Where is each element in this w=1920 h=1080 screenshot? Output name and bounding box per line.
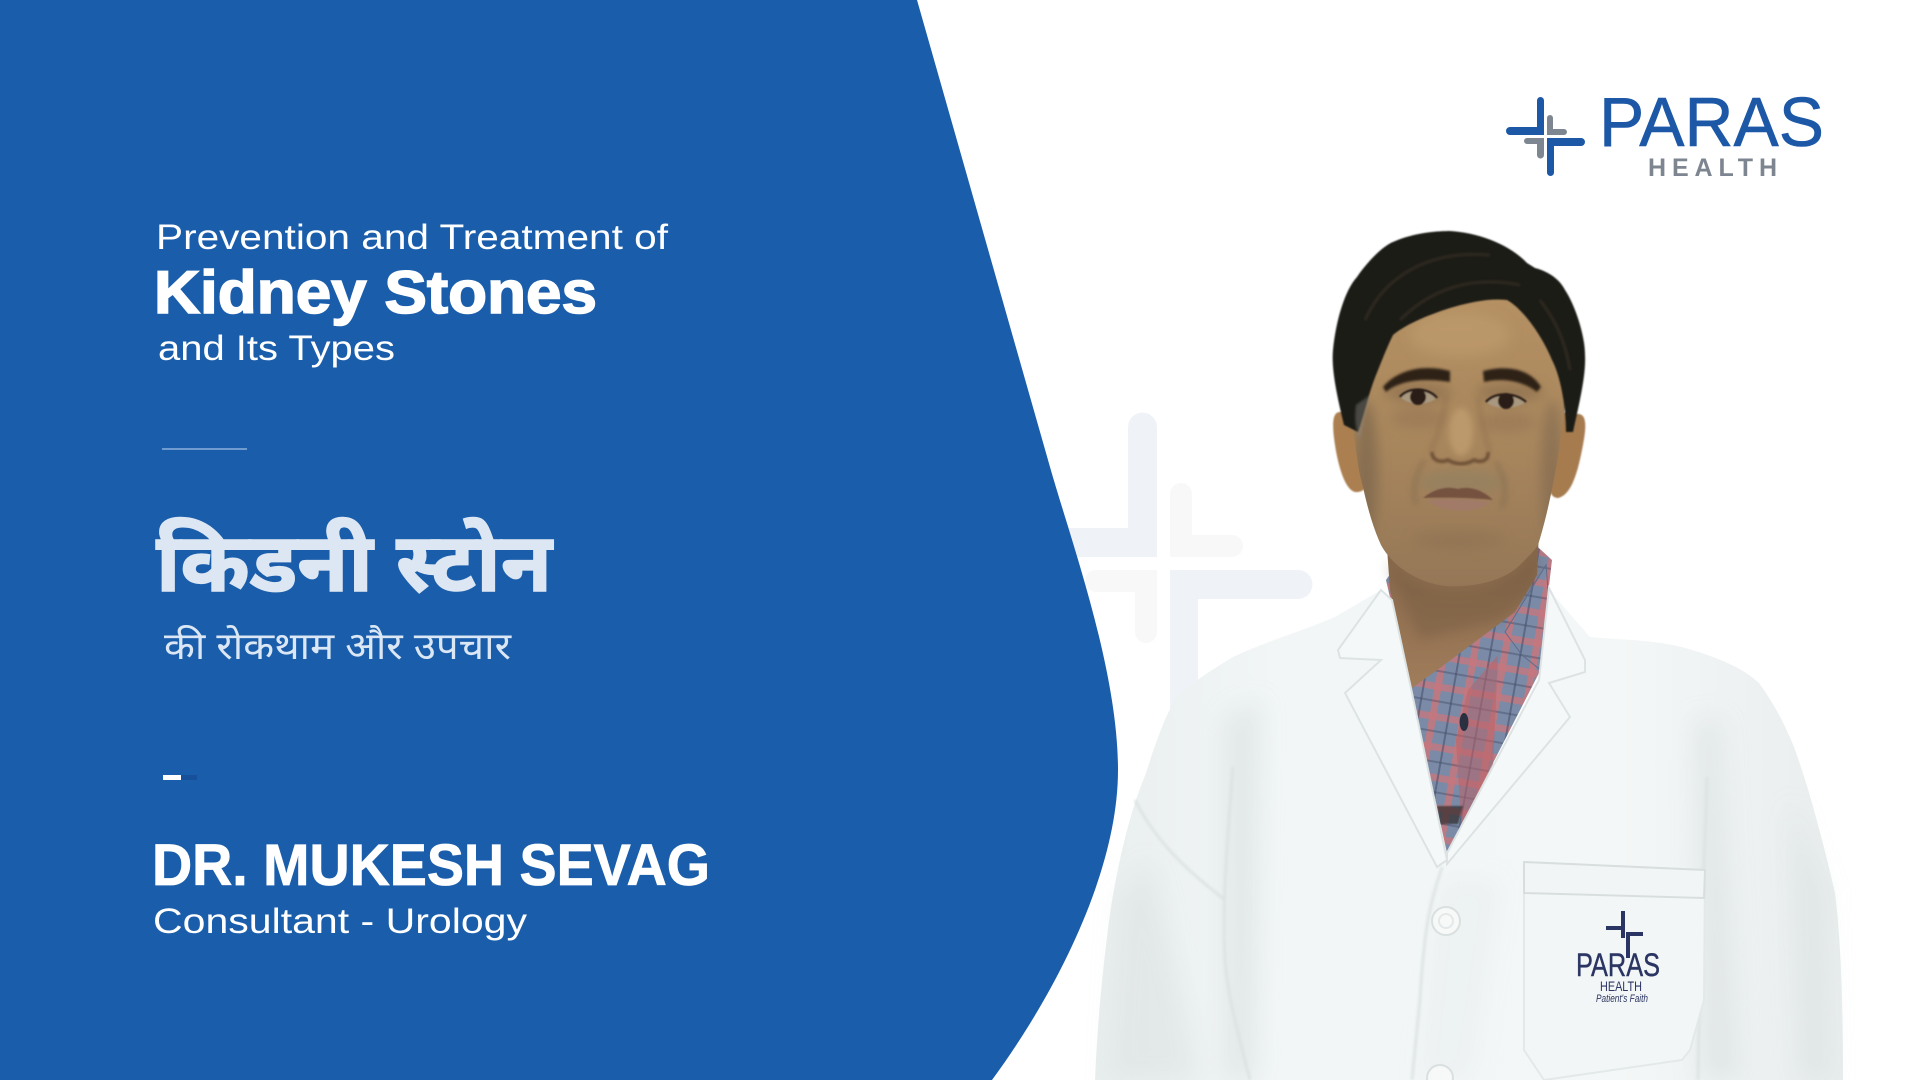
- shirt placket: [1456, 655, 1498, 835]
- doctor name and role: [152, 833, 710, 941]
- logo wordmark: PARAS: [1599, 83, 1824, 161]
- embroidered wordmark: PARAS: [1576, 947, 1660, 983]
- embroidered subtitle: HEALTH: [1600, 978, 1642, 994]
- title line: kidney stones: Kidney Stones: [154, 259, 597, 326]
- embroidered tagline: Patient's Faith: [1596, 993, 1648, 1005]
- lapels: [1338, 588, 1585, 867]
- icon: embroidered cross: [1606, 911, 1643, 958]
- nose: [1432, 452, 1488, 464]
- coat pocket: [1524, 862, 1705, 1080]
- neck: [1385, 510, 1540, 688]
- right ear: [1548, 412, 1585, 498]
- Hindi subtitle: की रोकथाम और उपचार: [164, 624, 513, 668]
- inner shirt shadow: [1437, 806, 1463, 824]
- watermark cross: [1060, 412, 1312, 720]
- doctor name: DR. MUKESH SEVAG: [152, 833, 710, 898]
- eyebrows: [1383, 368, 1541, 392]
- coat buttons: [1427, 907, 1460, 1080]
- mouth: [1423, 488, 1493, 511]
- shirt: [1386, 540, 1552, 853]
- accent dash: [163, 775, 197, 780]
- icon: cross mark: [1506, 97, 1585, 176]
- logo: Paras Health: [1506, 83, 1824, 182]
- grey sideburn: [1355, 395, 1370, 440]
- shirt button: [1460, 713, 1468, 731]
- lab coat: [1095, 590, 1843, 1080]
- hair highlights: [1365, 254, 1570, 370]
- blue panel: [0, 0, 1118, 1080]
- doctor role: Consultant - Urology: [153, 902, 528, 941]
- hair: [1333, 231, 1585, 432]
- left ear: [1333, 412, 1369, 492]
- shirt collar: [1505, 565, 1552, 672]
- face: [1352, 290, 1566, 586]
- doctor portrait: [1095, 231, 1843, 1080]
- coat embroidered logo: [1576, 911, 1660, 1005]
- head: [1333, 231, 1585, 586]
- face shading: [1354, 321, 1562, 531]
- Hindi title: किडनी स्टोन: [156, 518, 554, 609]
- divider line: [162, 448, 247, 450]
- title line: prevention: Prevention and Treatment of: [156, 218, 668, 257]
- logo subtitle: HEALTH: [1648, 154, 1777, 182]
- eyes: [1400, 389, 1526, 409]
- neck shadow: [1385, 550, 1540, 640]
- title block: [154, 218, 668, 368]
- title line: types: and Its Types: [158, 329, 395, 368]
